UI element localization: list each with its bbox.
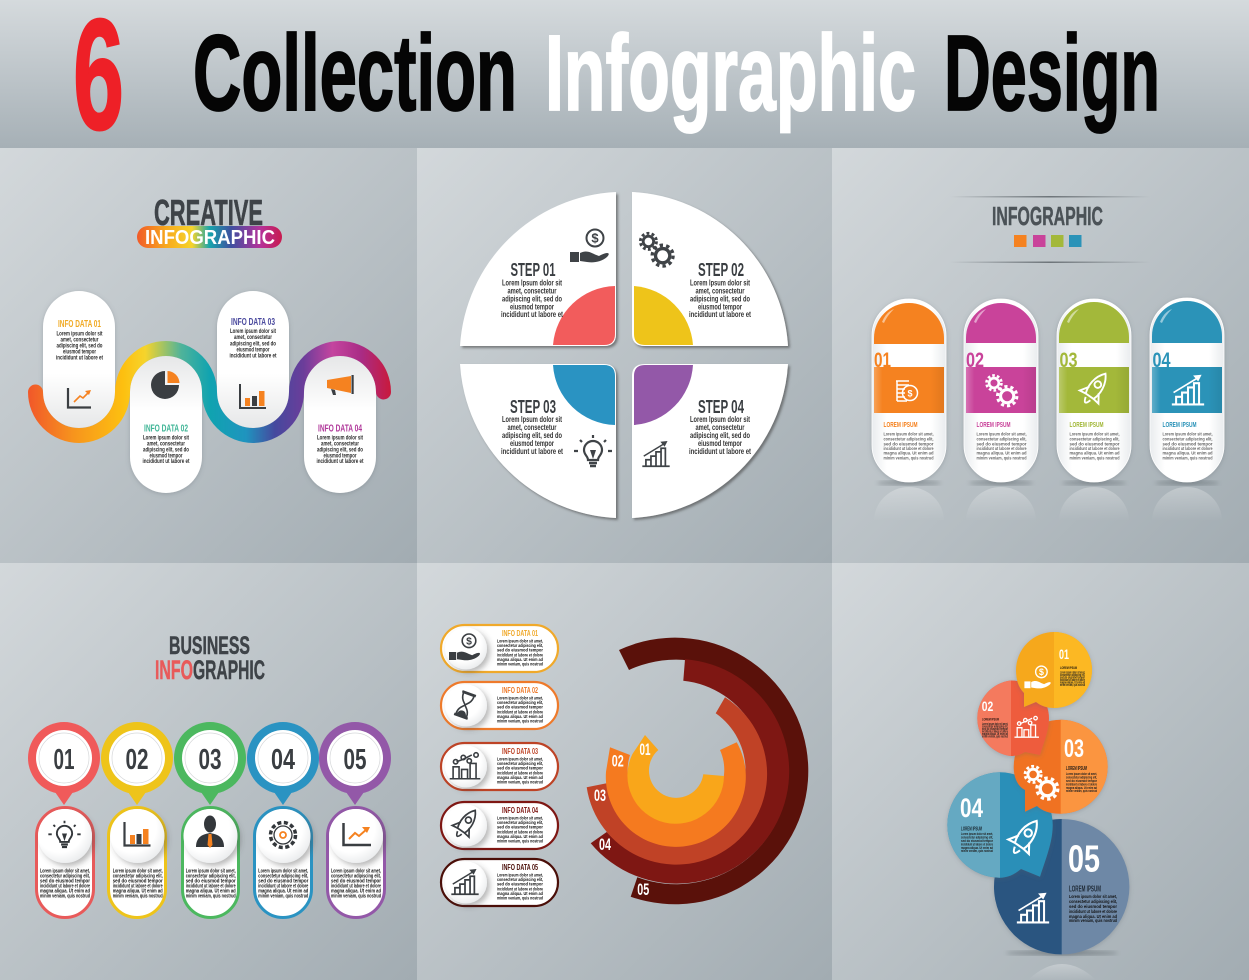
quadrant: step 01: eiusmod tempor [510,302,554,312]
icon: rocket [1004,814,1047,860]
list item 02: minim veniam, quis nostrud [497,719,543,725]
list item 03: consectetur adipiscing elit, [497,761,543,767]
list item 04: minim veniam, quis nostrud [497,839,543,845]
capsule 02: Lorem ipsum dolor sit amet, [976,432,1027,438]
list item 02: sed do eiusmod tempor [497,705,543,711]
capsule: info data 02: INFO DATA 02 [144,423,188,435]
ring labels [594,740,650,899]
quadrant: step 01 [460,192,616,346]
icon: growth chart [642,441,670,466]
icon: rocket [449,805,484,842]
pin and card 04 [247,722,319,918]
pin and card 05: Lorem ipsum dolor sit amet, [331,868,381,874]
list item 03: Lorem ipsum dolor sit amet, [497,756,543,762]
pin and card 04: 04 [271,744,295,776]
pin and card 02: Lorem ipsum dolor sit amet, [113,868,163,874]
heading: business infographic: GRAPHIC [193,655,265,685]
icon: business person [196,816,224,848]
capsule: info data 01: adipiscing elit, sed do [56,343,103,349]
icon: growth chart [1017,893,1049,922]
bubble 05: LOREM IPSUM [1069,884,1101,894]
ring labels: 03 [594,786,606,805]
pin and card 05: consectetur adipiscing elit, [331,874,381,880]
capsule: info data 01: eiusmod tempor [63,350,96,356]
bubble 05: sed do eiusmod tempor [1069,904,1117,910]
capsule 03: LOREM IPSUM [1070,420,1104,429]
icon: rocket [1076,367,1115,409]
quadrant: step 03: amet, consectetur [508,423,556,432]
pin and card 04: minim veniam, quis nostrud [258,894,308,900]
yellow wedge [634,286,693,345]
capsule: info data 03: INFO DATA 03 [231,316,275,328]
pin and card 02: minim veniam, quis nostrud [113,894,163,900]
capsule 02: consectetur adipiscing elit, [976,436,1027,442]
title: Collection Infographic Design: Collection [193,12,517,133]
quadrant: step 01: amet, consectetur [508,286,556,296]
quadrant: step 04: STEP 04 [698,397,744,417]
list item 01: consectetur adipiscing elit, [497,643,543,649]
list item 02 [441,682,558,729]
number 01: 01 [1059,646,1069,662]
ring 04 [591,659,789,884]
list item 04: sed do eiusmod tempor [497,825,543,831]
bubble 01 [1016,632,1092,708]
bubble 03 [1014,720,1108,814]
quadrant: step 03: eiusmod tempor [510,439,554,448]
capsule: info data 04: eiusmod tempor [324,453,357,459]
ring 01 [627,735,724,824]
pin and card 01: 01 [54,744,74,776]
list item 05: consectetur adipiscing elit, [497,877,543,883]
capsule: info data 03: eiusmod tempor [236,347,270,353]
bubble 04: minim veniam, quis nostrud [961,849,993,853]
pin and card 04: sed do eiusmod tempor [258,878,308,884]
list item 02: incididunt ut labore et dolore [497,709,543,715]
number 04: 04 [1152,349,1171,372]
capsule: info data 01: incididunt ut labore et [56,356,103,362]
quadrant: step 02: incididunt ut labore et [689,310,751,319]
bubble 02: Lorem ipsum dolor sit amet, [982,722,1008,726]
ring 02 [606,742,746,847]
pin and card 03: 03 [198,744,222,776]
list item 03: minim veniam, quis nostrud [497,780,543,786]
ring 03 [587,697,767,865]
bubble 01: consectetur adipiscing elit, [1060,673,1085,677]
bubble 04: consectetur adipiscing elit, [961,836,993,840]
capsule: info data 04: amet, consectetur [321,441,359,447]
title: Collection Infographic Design [193,12,1160,133]
capsule 03: magna aliqua. Ut enim ad [1070,451,1120,457]
heading: business infographic [155,632,265,685]
quadrant: step 02: Lorem Ipsum dolor sit [690,278,750,288]
red wedge [553,286,615,345]
header band [0,0,1249,148]
panel: business infographic pins [0,563,417,980]
bubble 04: LOREM IPSUM [961,826,982,832]
capsule 03: sed do eiusmod tempor [1070,441,1120,447]
capsule 04: consectetur adipiscing elit, [1162,436,1213,442]
pin and card 03: incididunt ut labore et dolore [186,884,236,890]
pin and card 01 [28,722,100,918]
bubble 05: minim veniam, quis nostrud [1069,918,1117,924]
icon: bar chart [240,384,266,408]
quadrant: step 04 [632,364,788,518]
capsule: info data 01 [43,291,115,428]
list item 03 [441,743,558,790]
capsule: info data 03: amet, consectetur [234,335,272,341]
bubble 01: magna aliqua. Ut enim ad [1060,680,1085,684]
icon: hand with coin [449,634,480,660]
icon: gear [270,822,296,848]
pin and card 04: consectetur adipiscing elit, [258,874,309,880]
pin and card 03: consectetur adipiscing elit, [186,874,236,880]
bubble 03: magna aliqua. Ut enim ad [1066,786,1097,790]
ring labels: 02 [612,752,624,771]
list item 04: incididunt ut labore et dolore [497,829,543,835]
heading: infographic with colour squares [950,196,1150,263]
list item 03: INFO DATA 03 [502,747,538,756]
number 02: 02 [982,698,993,714]
capsule 02 [964,299,1038,521]
pin and card 04: incididunt ut labore et dolore [258,884,308,890]
capsule 04: LOREM IPSUM [1162,420,1196,429]
quadrant: step 03 [460,364,616,518]
heading: creative infographic [137,192,282,249]
capsule 02: sed do eiusmod tempor [976,441,1027,447]
pin and card 03: minim veniam, quis nostrud [186,894,236,900]
icon: coins [896,381,918,401]
bubble 03: minim veniam, quis nostrud [1066,789,1097,793]
pin and card 01: consectetur adipiscing elit, [40,874,90,880]
heading: creative infographic: INFOGRAPHIC [145,227,275,249]
list item 02: Lorem ipsum dolor sit amet, [497,696,543,702]
bubble 02: minim veniam, quis nostrud [982,734,1008,738]
capsule 01: consectetur adipiscing elit, [884,436,934,442]
icon: gears [986,375,1017,406]
capsule: info data 01: amet, consectetur [60,337,99,343]
capsule: info data 04: Lorem ipsum dolor sit [317,435,363,441]
list item 01: minim veniam, quis nostrud [497,662,543,668]
quadrant: step 03: adipiscing elit, sed do [502,431,562,440]
list item 04 [441,802,558,849]
bubble 03: consectetur adipiscing elit, [1066,776,1097,780]
blue wedge [553,365,615,425]
quadrant: step 04: adipiscing elit, sed do [690,431,750,440]
pin and card 02: sed do eiusmod tempor [113,878,163,884]
icon: coins: $ [907,388,913,398]
list item 01: INFO DATA 01 [502,629,538,638]
heading: business infographic: BUSINESS [169,632,250,660]
list item 05: incididunt ut labore et dolore [497,886,543,892]
number 01: 01 [874,349,891,372]
list item 01: Lorem ipsum dolor sit amet, [497,638,543,644]
icon: growth chart [451,869,479,894]
icon: hand with coin [570,230,609,262]
bubble 03: LOREM IPSUM [1066,766,1087,772]
capsule: info data 04 [304,356,376,493]
capsule: info data 03: incididunt ut labore et [230,353,276,359]
pin and card 02: magna aliqua. Ut enim ad [113,888,163,894]
capsule 03: Lorem ipsum dolor sit amet, [1070,432,1120,438]
bubble 05: incididunt ut labore et dolore [1069,909,1117,915]
icon: light bulb [48,821,81,847]
ring labels: 04 [599,835,611,854]
capsule 01: magna aliqua. Ut enim ad [884,451,934,457]
icon: light bulb [574,435,612,466]
list item 05: Lorem ipsum dolor sit amet, [497,872,543,878]
bubble 02: sed do eiusmod tempor [982,727,1008,731]
list item 04: magna aliqua. Ut enim ad [497,834,543,840]
pin and card 05: 05 [344,744,366,776]
bubble 01: LOREM IPSUM [1060,665,1077,670]
capsule: info data 02 [130,356,202,493]
list item 05: INFO DATA 05 [502,863,538,872]
bubble 04: magna aliqua. Ut enim ad [961,846,993,850]
capsule: info data 04: incididunt ut labore et [316,459,364,465]
capsule 02: magna aliqua. Ut enim ad [976,451,1027,457]
capsule: info data 03: adipiscing elit, sed do [230,341,276,347]
icon: hourglass [454,691,476,719]
quadrant: step 03: incididunt ut labore et [501,447,563,456]
list item 05: minim veniam, quis nostrud [497,896,543,902]
heading: creative infographic: CREATIVE [154,192,263,233]
pin and card 02: incididunt ut labore et dolore [113,884,163,890]
pin and card 02: consectetur adipiscing elit, [113,874,163,880]
capsule 04: magna aliqua. Ut enim ad [1162,451,1213,457]
capsule 03 [1057,299,1131,521]
panel: stacked speech bubbles [832,563,1249,980]
ring labels: 05 [637,880,649,899]
capsule 04: minim veniam, quis nostrud [1162,456,1213,462]
title: Collection Infographic Design: Infographic [545,12,916,133]
bubble 02: magna aliqua. Ut enim ad [982,732,1008,736]
rainbow wave ribbon [36,349,384,436]
purple wedge [634,365,693,425]
capsule: info data 04: INFO DATA 04 [318,423,362,435]
list item 01: incididunt ut labore et dolore [497,652,543,658]
base reflection [1006,950,1118,980]
pin and card 05: minim veniam, quis nostrud [331,894,381,900]
bubble 02: consectetur adipiscing elit, [982,724,1008,728]
panel: four capsules [832,148,1249,563]
icon: megaphone [327,375,354,395]
bubble 01: Lorem ipsum dolor sit amet, [1060,670,1085,674]
ring labels: 01 [640,740,650,759]
list item 05 [441,859,558,906]
list item 03: sed do eiusmod tempor [497,766,543,772]
number 03: 03 [1064,735,1084,763]
number 04: 04 [960,793,983,823]
bubble 05: consectetur adipiscing elit, [1069,899,1118,905]
bubble 05 [994,819,1129,954]
bubble 02: incididunt ut labore et dolore [982,730,1008,734]
pin and card 02 [101,722,173,918]
pin and card 05: sed do eiusmod tempor [331,878,381,884]
quadrant: step 01: adipiscing elit, sed do [502,294,562,304]
pin and card 01: sed do eiusmod tempor [40,878,90,884]
icon: bar chart [124,822,150,846]
bubble 04: Lorem ipsum dolor sit amet, [961,832,993,836]
panel: spiral chart with list [417,563,832,980]
capsule 04: Lorem ipsum dolor sit amet, [1162,432,1213,438]
bubble 02: LOREM IPSUM [982,716,999,722]
capsule: info data 02: amet, consectetur [147,441,185,447]
capsule 03: minim veniam, quis nostrud [1070,456,1120,462]
quadrant: step 02 [632,192,788,346]
list item 04: Lorem ipsum dolor sit amet, [497,816,543,822]
quadrant: step 01: Lorem Ipsum dolor sit [502,278,562,288]
list item 03: magna aliqua. Ut enim ad [497,775,543,781]
bubble 05: Lorem ipsum dolor sit amet, [1069,894,1117,900]
bubble 01: minim veniam, quis nostrud [1060,683,1085,687]
icon: gears [640,233,673,266]
icon: line chart [344,823,371,845]
list item 01: magna aliqua. Ut enim ad [497,657,543,663]
pin and card 04: magna aliqua. Ut enim ad [258,888,308,894]
quadrant: step 02: adipiscing elit, sed do [690,294,750,304]
quadrant: step 03: STEP 03 [510,397,556,417]
quadrant: step 02: eiusmod tempor [698,302,742,312]
capsule: info data 02: incididunt ut labore et [142,459,190,465]
pin and card 01: incididunt ut labore et dolore [40,884,90,890]
pin and card 03: sed do eiusmod tempor [186,878,236,884]
icon: line chart [68,388,91,408]
ring 05 [619,638,808,904]
number 05: 05 [1068,839,1100,881]
bubble 05: magna aliqua. Ut enim ad [1069,914,1117,920]
capsule 01: sed do eiusmod tempor [884,441,934,447]
list item 02: magna aliqua. Ut enim ad [497,714,543,720]
pin and card 02: 02 [126,744,148,776]
heading: infographic with colour squares: INFOGRAPHIC [992,201,1103,231]
icon: bars and dots [1014,716,1039,737]
bubble 03: incididunt ut labore et dolore [1066,782,1097,786]
capsule 04: sed do eiusmod tempor [1162,441,1213,447]
quadrant: step 01: incididunt ut labore et [501,310,563,319]
icon: gears [1025,766,1058,799]
capsule 01: LOREM IPSUM [884,420,918,429]
pin and card 03: Lorem ipsum dolor sit amet, [186,868,236,874]
list item 01: sed do eiusmod tempor [497,648,543,654]
list item 05: magna aliqua. Ut enim ad [497,891,543,897]
quadrant: step 02: STEP 02 [698,260,744,280]
spiral chart [587,638,808,904]
bubble 01: sed do eiusmod tempor [1060,676,1085,680]
number 02: 02 [966,349,984,372]
list item 04: INFO DATA 04 [502,806,538,815]
number 03: 03 [1060,349,1078,372]
pin and card 04: Lorem ipsum dolor sit amet, [258,868,309,874]
list item 04: consectetur adipiscing elit, [497,820,543,826]
capsule 01 [872,299,946,521]
capsule 03: incididunt ut labore et dolore [1070,446,1120,452]
capsule: info data 03 [217,291,289,428]
list item 02: consectetur adipiscing elit, [497,700,543,706]
list item 05: sed do eiusmod tempor [497,882,543,888]
capsule: info data 02: adipiscing elit, sed do [143,447,189,453]
quadrant: step 03: Lorem Ipsum dolor sit [502,415,562,424]
icon: growth chart [1172,375,1204,404]
pin and card 03 [174,722,246,918]
capsule 01: incididunt ut labore et dolore [884,446,934,452]
capsule: info data 03: Lorem ipsum dolor sit [230,329,276,335]
capsule: info data 04: adipiscing elit, sed do [317,447,363,453]
pin and card 03: magna aliqua. Ut enim ad [186,888,236,894]
quadrant: step 04: eiusmod tempor [698,439,742,448]
quadrant: step 02: amet, consectetur [696,286,744,296]
quadrant: step 04: Lorem Ipsum dolor sit [690,415,750,424]
panel: creative wave infographic [0,148,417,563]
capsule 03: consectetur adipiscing elit, [1070,436,1120,442]
pin and card 05: incididunt ut labore et dolore [331,884,381,890]
heading: business infographic: INFO [155,655,193,685]
bubble 03: Lorem ipsum dolor sit amet, [1066,772,1097,776]
icon: bars and dots [450,753,480,779]
capsule: info data 02: eiusmod tempor [150,453,183,459]
bubble 02 [977,680,1049,756]
bubble 01: incididunt ut labore et dolore [1060,678,1085,682]
bubble 04: sed do eiusmod tempor [961,839,994,843]
bubble 03: sed do eiusmod tempor [1066,779,1098,783]
quadrant: step 04: incididunt ut labore et [689,447,751,456]
pin and card 01: magna aliqua. Ut enim ad [40,888,90,894]
icon: hand with coin [1024,666,1051,688]
capsule 04 [1150,298,1224,521]
pin and card 01: Lorem ipsum dolor sit amet, [40,868,90,874]
pin and card 05: magna aliqua. Ut enim ad [331,888,381,894]
icon: pie chart [151,371,180,399]
bubble 04: incididunt ut labore et dolore [961,842,993,846]
list item 01 [441,625,558,672]
capsule 01: Lorem ipsum dolor sit amet, [884,432,934,438]
bubble 04 [947,772,1053,878]
capsule 02: incididunt ut labore et dolore [976,446,1027,452]
capsule 02: LOREM IPSUM [976,420,1010,429]
quadrant: step 01: STEP 01 [510,260,556,280]
pin and card 01: minim veniam, quis nostrud [40,894,90,900]
panel: four step circle [417,148,832,563]
capsule: info data 01: INFO DATA 01 [58,318,101,330]
list item 03: incididunt ut labore et dolore [497,770,543,776]
capsule 01: minim veniam, quis nostrud [884,456,934,462]
capsule 02: minim veniam, quis nostrud [976,456,1027,462]
capsule: info data 02: Lorem ipsum dolor sit [143,435,189,441]
list item 02: INFO DATA 02 [502,686,538,695]
capsule: info data 01: Lorem ipsum dolor sit [56,331,102,337]
pin and card 05 [319,722,391,918]
capsule 04: incididunt ut labore et dolore [1162,446,1213,452]
quadrant: step 04: amet, consectetur [696,423,744,432]
